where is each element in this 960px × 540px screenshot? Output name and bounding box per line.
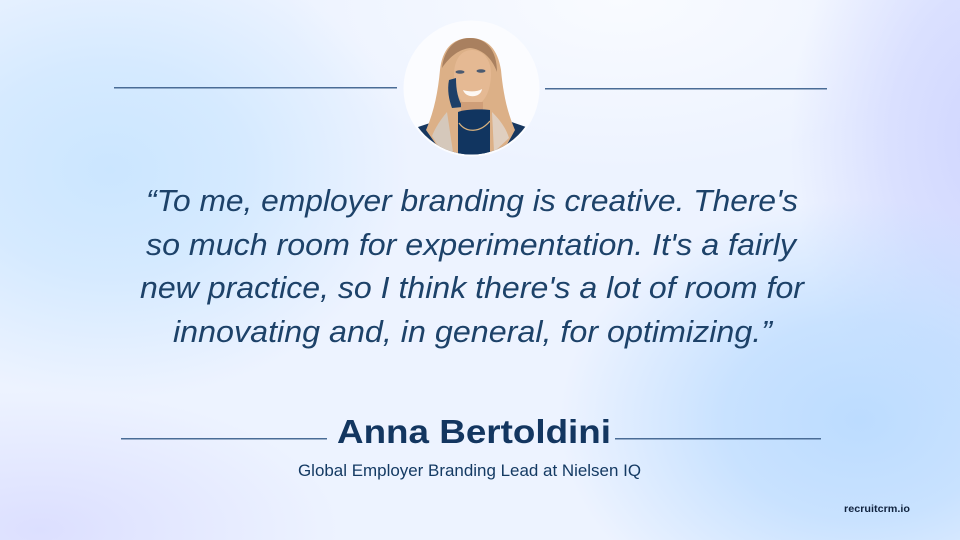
speaker name: Anna Bertoldini	[337, 413, 611, 450]
quote text: innovating and, in general, for optimizing.”	[173, 314, 774, 349]
quote text: new practice, so I think there's a lot of room for	[140, 270, 806, 305]
quote text: so much room for experimentation. It's a fairly	[146, 227, 799, 262]
speaker title: Global Employer Branding Lead at Nielsen IQ	[298, 461, 641, 480]
brand url: recruitcrm.io	[844, 503, 910, 515]
name left rule	[121, 438, 327, 440]
top right rule	[545, 88, 827, 90]
quote text	[140, 183, 806, 349]
name right rule	[615, 438, 821, 440]
top left rule	[114, 87, 397, 88]
quote text: “To me, employer branding is creative. There's	[146, 183, 798, 218]
portrait: Anna Bertoldini	[404, 20, 540, 160]
